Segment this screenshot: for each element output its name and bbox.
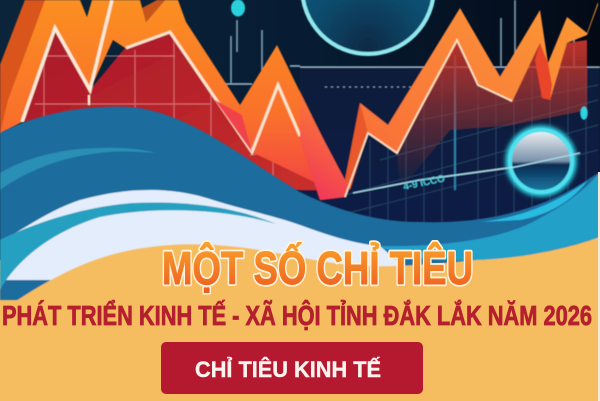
right edge strip xyxy=(598,172,600,401)
orange line band: left xyxy=(0,0,345,197)
dark notch shade xyxy=(142,0,165,22)
glowing sphere xyxy=(510,130,572,192)
dark shade: right band xyxy=(345,103,368,190)
wave: peach base xyxy=(0,237,600,401)
grid: left chart xyxy=(35,40,300,180)
button xyxy=(161,342,423,394)
red chart area left xyxy=(22,28,330,190)
red glow under right line xyxy=(397,40,587,190)
wave: pale band xyxy=(0,190,420,310)
icon: top cyan dot xyxy=(231,0,245,16)
button background xyxy=(161,342,423,394)
icon: small cyan dot xyxy=(580,106,588,120)
white line right xyxy=(345,40,512,197)
title: MỘT SỐ CHỈ TIÊU xyxy=(162,242,473,294)
top vertical lines xyxy=(231,0,574,83)
background: dark chart panel xyxy=(0,0,600,260)
wave: light blue right xyxy=(380,172,600,260)
swoosh: upper teal xyxy=(0,148,157,190)
red tip xyxy=(215,100,252,152)
dark shade: right band peak xyxy=(535,43,552,100)
horizon line xyxy=(353,153,580,193)
circle: top ring xyxy=(302,0,434,54)
white stub xyxy=(88,95,90,105)
chart artwork xyxy=(0,0,600,240)
dotted line xyxy=(325,86,420,88)
swoosh: cyan xyxy=(0,203,276,290)
lower right chart panel xyxy=(300,67,600,240)
white line left xyxy=(22,0,112,122)
orange line band: right xyxy=(300,2,598,200)
white line middle xyxy=(126,32,300,152)
vertical highlight line xyxy=(454,55,456,190)
accent: cyan sliver xyxy=(480,181,587,222)
waves xyxy=(0,107,600,401)
dark shade left edge xyxy=(0,0,45,134)
small chart label: 4-9 ICCO xyxy=(402,173,446,193)
wave: dark blue xyxy=(0,107,600,300)
title: MỘT SỐ CHỈ TIÊU xyxy=(162,242,473,294)
grid: right chart xyxy=(340,70,598,230)
sphere glow xyxy=(509,129,573,193)
button label: CHỈ TIÊU KINH TẾ xyxy=(195,357,381,382)
axis line: horizontal xyxy=(300,66,600,68)
